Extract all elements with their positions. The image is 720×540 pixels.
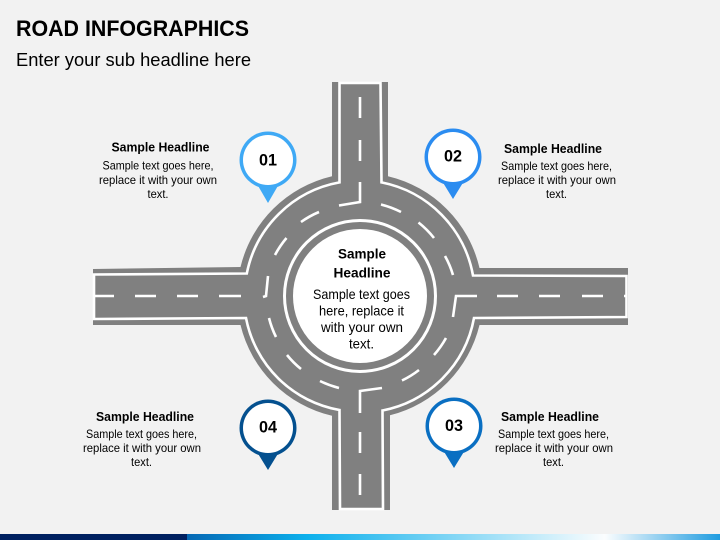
centre text: here, replace it	[319, 302, 404, 318]
text block 04: Sample Headline	[96, 409, 194, 424]
roundabout road	[93, 82, 628, 510]
text block 01: text.	[148, 188, 168, 201]
subtitle: Enter your sub headline here	[16, 49, 251, 70]
text block 01: Sample text goes here,	[102, 160, 214, 172]
text block 02	[498, 141, 616, 201]
lane dashes	[95, 97, 626, 495]
text block 02: replace it with your own	[498, 174, 616, 187]
centre text: Sample text goes	[313, 286, 410, 302]
pin 01	[240, 132, 296, 203]
text block 02: Sample Headline	[504, 141, 602, 156]
footer bar	[0, 534, 720, 540]
centre text	[313, 245, 410, 352]
centre text: Headline	[334, 264, 391, 280]
centre text: Sample	[338, 245, 386, 261]
text block 02: Sample text goes here,	[501, 160, 612, 173]
text block 03: Sample Headline	[501, 409, 599, 424]
centre circle	[293, 229, 427, 363]
pin 04: 04	[259, 418, 278, 436]
text block 03: text.	[543, 456, 564, 469]
title: ROAD INFOGRAPHICS	[16, 16, 249, 41]
pin 02: 02	[444, 146, 462, 166]
text block 03: replace it with your own	[495, 442, 613, 455]
text block 01: replace it with your own	[99, 174, 217, 187]
text block 04: Sample text goes here,	[86, 428, 197, 441]
text block 01	[99, 140, 217, 201]
road edge line	[94, 83, 626, 509]
pin 01: 01	[259, 150, 277, 170]
pin 03: 03	[445, 416, 463, 435]
text block 02: text.	[546, 188, 567, 201]
road surface	[93, 82, 628, 510]
text block 03: Sample text goes here,	[498, 428, 609, 441]
pin 03	[426, 398, 482, 468]
pin 02	[424, 128, 482, 199]
centre text: text.	[349, 336, 374, 352]
pin 04	[240, 400, 296, 470]
text block 04: text.	[131, 456, 152, 469]
inner ring line	[284, 220, 436, 372]
centre text: with your own	[320, 319, 403, 335]
text block 04	[83, 409, 201, 469]
text block 01: Sample Headline	[112, 140, 210, 154]
text block 03	[495, 409, 613, 469]
text block 04: replace it with your own	[83, 442, 201, 455]
